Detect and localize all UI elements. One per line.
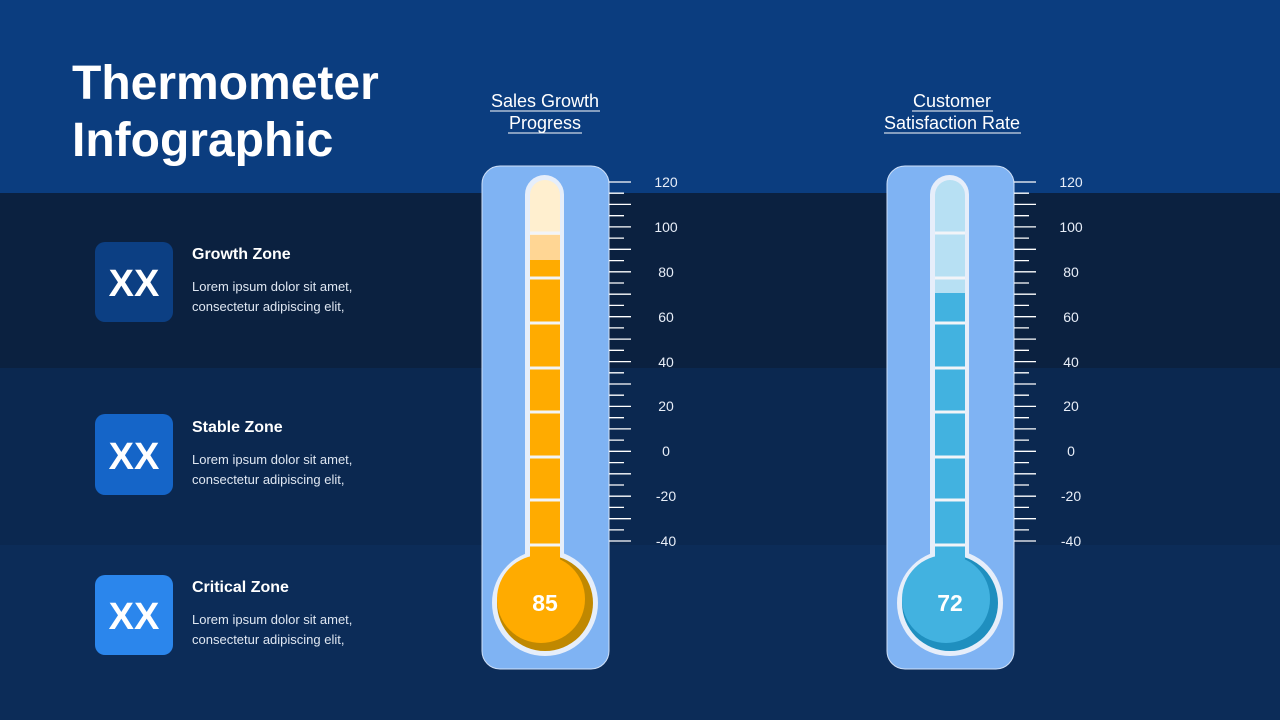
thermometer: sales 85: [482, 166, 609, 669]
scale: sales: 80: [658, 264, 674, 280]
zone: stable: XX: [109, 436, 160, 478]
zone: stable: [95, 414, 352, 495]
scale: sales: [609, 174, 678, 549]
title: Thermometer: [72, 57, 379, 110]
zone: growth: Growth Zone: [192, 246, 291, 263]
thermometer: satisfaction 72: [887, 166, 1014, 669]
title: [72, 57, 379, 167]
value: 85: 85: [532, 590, 558, 616]
scale: sales: 20: [658, 398, 674, 414]
scale: sales: 60: [658, 309, 674, 325]
heading: sales growth: Sales Growth: [491, 91, 599, 111]
zone: critical: Lorem ipsum dolor sit amet,: [192, 612, 352, 627]
scale: satisfaction: 20: [1063, 398, 1079, 414]
scale: satisfaction: [1014, 174, 1083, 549]
zone: critical: Critical Zone: [192, 579, 289, 596]
zone: growth: XX: [109, 263, 160, 305]
scale: satisfaction: 80: [1063, 264, 1079, 280]
scale: satisfaction: 60: [1063, 309, 1079, 325]
heading: sales growth: Progress: [509, 113, 581, 133]
scale: sales: -40: [656, 533, 676, 549]
scale: sales: 40: [658, 354, 674, 370]
zone: critical: consectetur adipiscing elit,: [192, 632, 344, 647]
scale: satisfaction: -40: [1061, 533, 1081, 549]
zone: stable: consectetur adipiscing elit,: [192, 472, 344, 487]
heading: sales growth: [490, 91, 600, 133]
scale: satisfaction: 120: [1059, 174, 1083, 190]
scale: satisfaction: 100: [1059, 219, 1083, 235]
scale: sales: 0: [662, 443, 670, 459]
heading: customer satisfaction: Customer: [913, 91, 991, 111]
zone: critical: XX: [109, 596, 160, 638]
zone: stable: Stable Zone: [192, 419, 283, 436]
heading: customer satisfaction: Satisfaction Rate: [884, 113, 1020, 133]
scale: satisfaction: 0: [1067, 443, 1075, 459]
zone: stable: Lorem ipsum dolor sit amet,: [192, 452, 352, 467]
heading: customer satisfaction: [884, 91, 1021, 133]
zone: growth: [95, 242, 352, 322]
title: Infographic: [72, 114, 333, 167]
zone: growth: Lorem ipsum dolor sit amet,: [192, 279, 352, 294]
zone: growth: consectetur adipiscing elit,: [192, 299, 344, 314]
scale: sales: 100: [654, 219, 678, 235]
scale: satisfaction: -20: [1061, 488, 1081, 504]
zone: critical: [95, 575, 352, 655]
scale: sales: -20: [656, 488, 676, 504]
scale: satisfaction: 40: [1063, 354, 1079, 370]
scale: sales: 120: [654, 174, 678, 190]
value: 72: 72: [937, 590, 963, 616]
